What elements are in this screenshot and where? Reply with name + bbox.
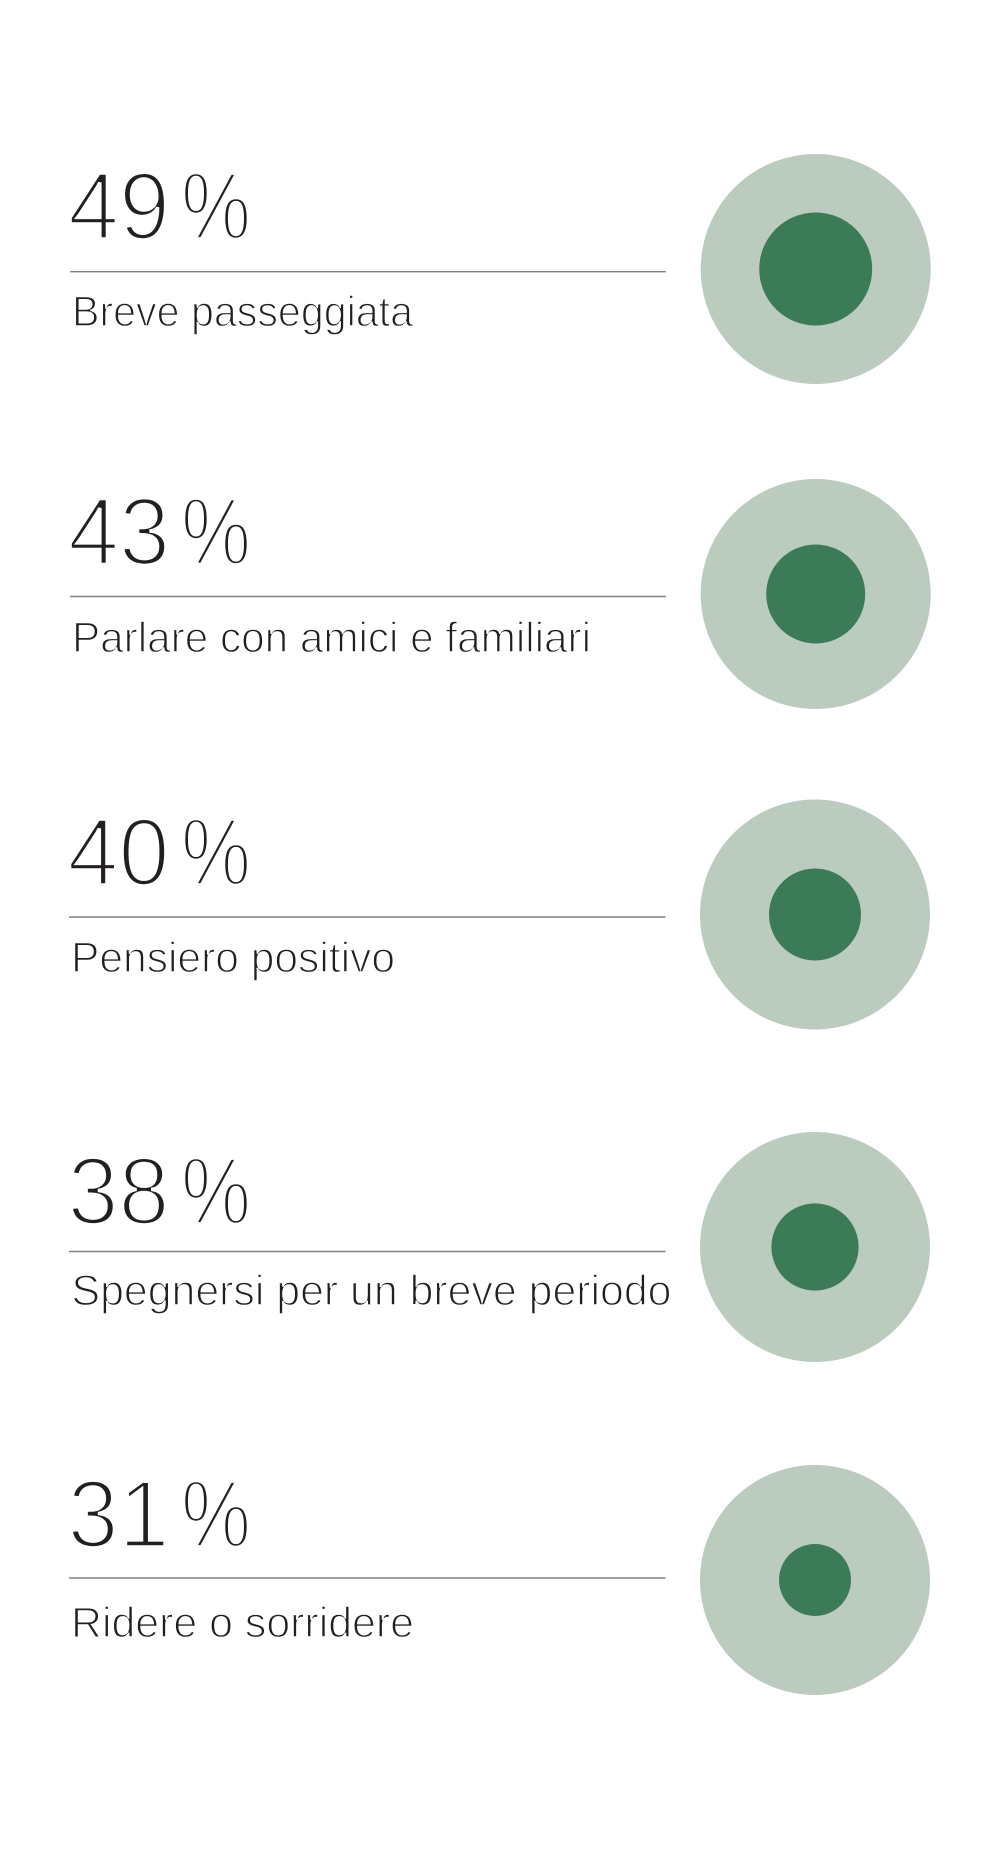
dot: 43 percent — [701, 479, 931, 709]
percentage 43 %: 43 — [68, 478, 170, 586]
dot: 40 percent — [700, 800, 930, 1030]
percentage 40 %: % — [181, 799, 251, 906]
percentage 49 %: % — [181, 153, 251, 260]
percentage 38 % — [68, 1138, 251, 1245]
label: Ridere o sorridere: Ridere o sorridere — [71, 1599, 414, 1647]
label: Spegnersi per un breve periodo: Spegnersi per un breve periodo — [72, 1267, 672, 1315]
percentage 43 %: % — [181, 478, 251, 586]
label: Parlare con amici e familiari: Parlare con amici e familiari — [72, 614, 591, 662]
percentage 31 % — [68, 1461, 251, 1568]
percentage 40 % — [68, 799, 251, 906]
percentage 31 %: 31 — [68, 1461, 170, 1568]
dot: 49 percent — [701, 154, 931, 384]
percentage 49 % — [68, 153, 251, 260]
row: 49% Breve passeggiata — [68, 153, 931, 384]
label: Breve passeggiata: Breve passeggiata — [72, 288, 413, 336]
label: Pensiero positivo: Pensiero positivo — [71, 934, 395, 982]
row: 43% Parlare con amici e familiari — [68, 478, 931, 709]
dot: 31 percent — [700, 1465, 930, 1695]
percentage 49 %: 49 — [68, 153, 170, 260]
percentage 38 %: 38 — [68, 1138, 170, 1245]
row: 38% Spegnersi per un breve periodo — [68, 1132, 930, 1362]
percentage 40 %: 40 — [68, 799, 170, 906]
dot: 38 percent — [700, 1132, 930, 1362]
percentage 31 %: % — [181, 1461, 251, 1568]
percentage 38 %: % — [181, 1138, 251, 1245]
row: 40% Pensiero positivo — [68, 799, 930, 1030]
row: 31% Ridere o sorridere — [68, 1461, 930, 1695]
percentage 43 % — [68, 478, 251, 586]
